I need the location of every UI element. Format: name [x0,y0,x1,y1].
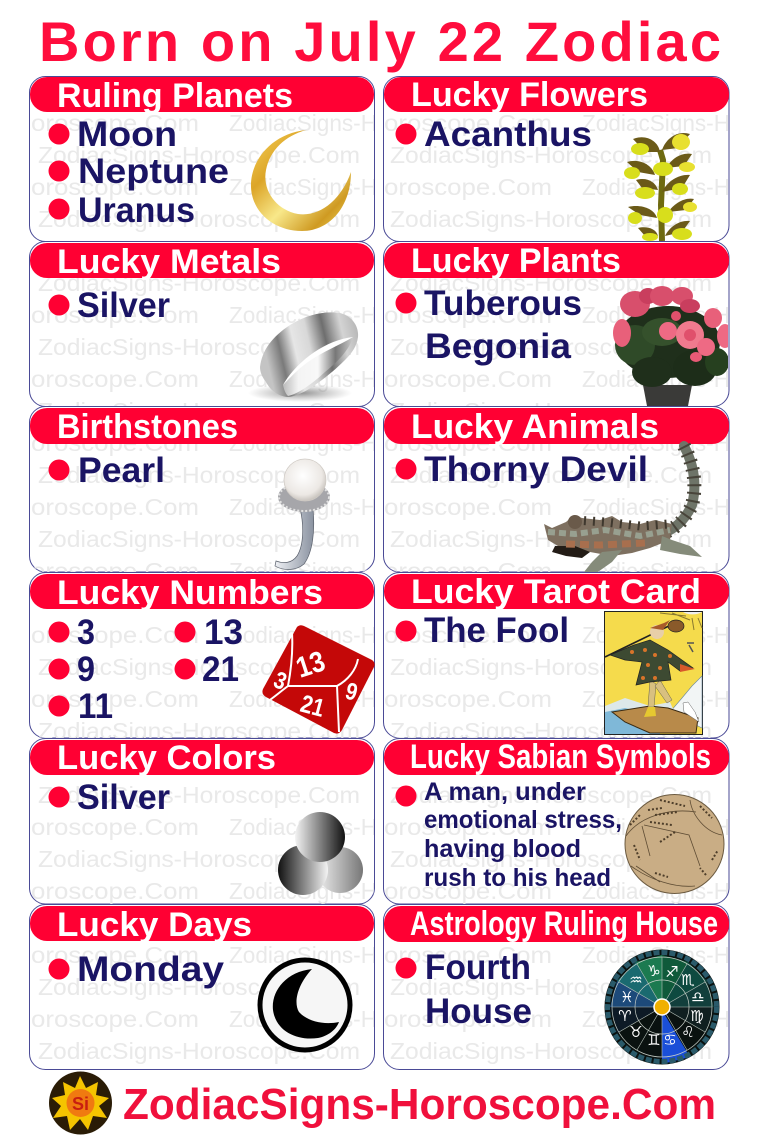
panel: ruling planets: oroscope.Com [31,174,199,200]
panel: lucky days: oroscope.Com [31,1006,199,1032]
list: plants: Begonia [425,327,572,366]
heading: lucky plants: Lucky Plants [411,242,621,280]
panel: lucky sabian symbols: ZodiacSigns-H [582,878,730,904]
heading: ruling planets: Ruling Planets [57,77,293,115]
icon: the fool tarot card [604,612,702,734]
list: birthstones: Pearl [78,451,165,490]
panel: lucky flowers: ZodiacSigns-H [582,174,730,200]
icon: zodiac wheel [604,950,720,1064]
panel: birthstones: oroscope.Com [31,430,199,456]
list: ruling planets [48,115,229,230]
panel: lucky colors: ZodiacSigns-H [229,878,377,904]
list: sabian symbol: rush to his head [424,864,611,892]
panel: ruling planets: ZodiacSigns-H [229,174,377,200]
icon: moon symbol [260,960,350,1050]
panel: lucky colors: oroscope.Com [31,814,199,840]
panel: lucky colors: ZodiacSigns-H [229,814,377,840]
panel: astrology ruling house: ZodiacSigns-H [582,942,730,968]
panel: lucky colors: oroscope.Com [31,878,199,904]
panel: lucky tarot card: ZodiacSigns-H [582,686,730,712]
panel: lucky plants: oroscope.Com [384,366,552,392]
panel: lucky animals: ZodiacSigns-H [582,558,730,584]
list: numbers [48,613,243,726]
heading: lucky tarot card: Lucky Tarot Card [411,573,701,611]
panel: ruling planets: ZodiacSigns-H [229,110,377,136]
list: numbers: 13 [204,613,243,652]
icon: zodiac wheel: ♍ [690,1007,704,1025]
icon: red polyhedral die [262,625,375,734]
panel: lucky metals [30,242,377,424]
list: ruling planets: Neptune [78,152,229,191]
panel: birthstones: oroscope.Com [31,494,199,520]
heading: lucky metals: Lucky Metals [57,243,281,281]
heading: lucky days: Lucky Days [57,906,252,944]
panel: lucky metals: oroscope.Com [31,302,199,328]
panel: lucky days [30,904,377,1070]
panel: astrology ruling house: ZodiacSigns-Horoscope.Com [390,1038,712,1064]
icon: pearl ring [275,459,330,570]
icon: zodiac wheel: ♏ [681,971,695,989]
icon: zodiac wheel: ♌ [681,1023,695,1041]
panel: lucky animals: ZodiacSigns-H [582,494,730,520]
panel: lucky metals: ZodiacSigns-Horoscope.Com [38,270,360,296]
panel: astrology ruling house [384,904,730,1070]
panel: lucky tarot card: ZodiacSigns-Horoscope.Com [390,718,712,744]
panel: astrology ruling house: oroscope.Com [384,942,552,968]
panel: lucky animals: oroscope.Com [384,430,552,456]
panel: lucky metals: ZodiacSigns-Horoscope.Com [38,398,360,424]
panel: lucky tarot card: oroscope.Com [384,686,552,712]
list: sabian symbol [396,778,622,892]
icon: thorny devil lizard [544,446,702,574]
panel: lucky metals: oroscope.Com [31,366,199,392]
heading: lucky flowers: Lucky Flowers [411,76,648,114]
list: sabian symbol: having blood [424,835,581,863]
panel: lucky animals: oroscope.Com [384,558,552,584]
list: animals: Thorny Devil [424,450,648,489]
panel: lucky days: ZodiacSigns-H [229,942,377,968]
list: ruling house [396,948,532,1031]
icon: zodiac wheel: ♑ [647,962,661,980]
icon: red polyhedral die: 13 [292,644,329,684]
list: sabian symbol: emotional stress, [424,806,622,834]
heading: birthstones: Birthstones [57,408,238,446]
panel: lucky colors: ZodiacSigns-Horoscope.Com [38,782,360,808]
heading: lucky numbers: Lucky Numbers [57,574,323,612]
panel: lucky numbers: oroscope.Com [31,686,199,712]
panel: lucky flowers: oroscope.Com [384,174,552,200]
panel: lucky metals: ZodiacSigns-H [229,302,377,328]
panel: lucky flowers: oroscope.Com [384,110,552,136]
icon: site logo sun: Si [72,1094,89,1114]
list: tarot: The Fool [424,611,569,650]
list: numbers: 3 [77,613,95,652]
list: numbers: 21 [202,650,239,689]
panel: lucky numbers: ZodiacSigns-H [229,622,377,648]
panel: lucky sabian symbols [384,738,730,904]
panel: lucky sabian symbols: oroscope.Com [384,814,552,840]
icon: silver spheres [278,812,363,895]
panel: lucky metals: ZodiacSigns-H [229,366,377,392]
icon: red polyhedral die: 9 [343,677,361,706]
panel: lucky tarot card: ZodiacSigns-Horoscope.Com [390,654,712,680]
panel: astrology ruling house: oroscope.Com [384,1006,552,1032]
panel: lucky days: oroscope.Com [31,942,199,968]
panel: birthstones: ZodiacSigns-Horoscope.Com [38,462,360,488]
panel: lucky days: ZodiacSigns-Horoscope.Com [38,1038,360,1064]
panel: lucky plants: oroscope.Com [384,302,552,328]
list: plants [396,284,582,366]
icon: zodiac wheel: ♐ [665,963,679,981]
panel: lucky plants: ZodiacSigns-H [582,366,730,392]
panel: lucky tarot card [384,572,730,744]
icon: golden crescent moon [251,130,351,231]
list: ruling house: Fourth [425,948,531,987]
heading: lucky animals: Lucky Animals [411,408,659,446]
list: colors: Silver [77,778,170,817]
panel: birthstones: ZodiacSigns-H [229,558,377,584]
list: days: Monday [77,950,225,989]
panel: lucky animals: ZodiacSigns-Horoscope.Com [390,462,712,488]
list: flowers: Acanthus [424,115,592,154]
panel: lucky numbers: oroscope.Com [31,622,199,648]
panel: astrology ruling house: ZodiacSigns-Horoscope.Com [390,974,712,1000]
panel: lucky plants: ZodiacSigns-Horoscope.Com [390,398,712,424]
list: ruling planets: Uranus [78,191,195,230]
panel: lucky animals: ZodiacSigns-H [582,430,730,456]
panel: birthstones: ZodiacSigns-H [229,494,377,520]
panel: lucky colors [30,738,377,904]
icon: red polyhedral die: 21 [298,689,328,722]
panel: birthstones [30,406,377,584]
panel: lucky flowers: ZodiacSigns-Horoscope.Com [390,142,712,168]
icon: silver ring [248,312,358,402]
panel: lucky plants: ZodiacSigns-Horoscope.Com [390,334,712,360]
list: ruling house: House [425,992,532,1031]
list: numbers: 9 [77,650,95,689]
list: metals: Silver [77,286,170,325]
panel: lucky days: ZodiacSigns-Horoscope.Com [38,974,360,1000]
icon: acanthus flower [624,133,697,241]
panel: lucky tarot card: oroscope.Com [384,622,552,648]
panel: lucky numbers: ZodiacSigns-Horoscope.Com [38,718,360,744]
panel: birthstones: oroscope.Com [31,558,199,584]
icon: red polyhedral die: 3 [270,666,291,695]
panel: lucky animals: oroscope.Com [384,494,552,520]
panel: lucky numbers: ZodiacSigns-H [229,686,377,712]
panel: ruling planets [30,76,377,242]
icon: zodiac wheel: ♉ [629,1023,643,1041]
title: Born on July 22 Zodiac [39,10,721,73]
panel: lucky plants: ZodiacSigns-H [582,302,730,328]
panel: lucky animals [384,406,730,584]
icon: tuberous begonia plant [613,286,733,406]
panel: ruling planets: oroscope.Com [31,110,199,136]
panel: ruling planets: ZodiacSigns-Horoscope.Com [38,206,360,232]
icon: astrology chart disc [625,794,724,894]
panel: lucky metals: ZodiacSigns-Horoscope.Com [38,334,360,360]
icon: zodiac wheel: ♓ [620,988,634,1006]
panel: lucky plants: ZodiacSigns-Horoscope.Com [390,270,712,296]
panel: lucky numbers [30,572,377,744]
panel: lucky tarot card: ZodiacSigns-H [582,622,730,648]
icon: zodiac wheel: ♎ [691,988,705,1006]
icon: zodiac wheel: ♒ [629,971,643,989]
list: sabian symbol: A man, under [424,778,586,806]
list: ruling planets: Moon [77,115,177,154]
panel: lucky flowers [384,76,730,242]
panel: birthstones: ZodiacSigns-Horoscope.Com [38,526,360,552]
panel: lucky numbers: ZodiacSigns-Horoscope.Com [38,654,360,680]
panel: lucky sabian symbols: ZodiacSigns-Horoscope.Com [390,846,712,872]
panel: ruling planets: ZodiacSigns-Horoscope.Com [38,142,360,168]
panel: astrology ruling house: ZodiacSigns-H [582,1006,730,1032]
panel: lucky sabian symbols: ZodiacSigns-Horoscope.Com [390,782,712,808]
panel: lucky colors: ZodiacSigns-Horoscope.Com [38,846,360,872]
icon: zodiac wheel: ♊ [647,1031,661,1049]
panel: lucky sabian symbols: ZodiacSigns-H [582,814,730,840]
list: numbers: 11 [78,687,113,726]
icon: zodiac wheel: ♋ [663,1031,677,1049]
icon: zodiac wheel: ♈ [618,1007,632,1025]
panel: lucky plants [383,242,730,406]
heading: lucky colors: Lucky Colors [57,739,276,777]
list: plants: Tuberous [424,284,582,323]
panel: lucky flowers: ZodiacSigns-Horoscope.Com [390,206,712,232]
panel: lucky sabian symbols: oroscope.Com [384,878,552,904]
panel: lucky animals: ZodiacSigns-Horoscope.Com [390,526,712,552]
footer website name: ZodiacSigns-Horoscope.Com [123,1080,716,1129]
icon: site logo sun [49,1072,112,1134]
panel: birthstones: ZodiacSigns-H [229,430,377,456]
panel: lucky flowers: ZodiacSigns-H [582,110,730,136]
panel: lucky days: ZodiacSigns-H [229,1006,377,1032]
